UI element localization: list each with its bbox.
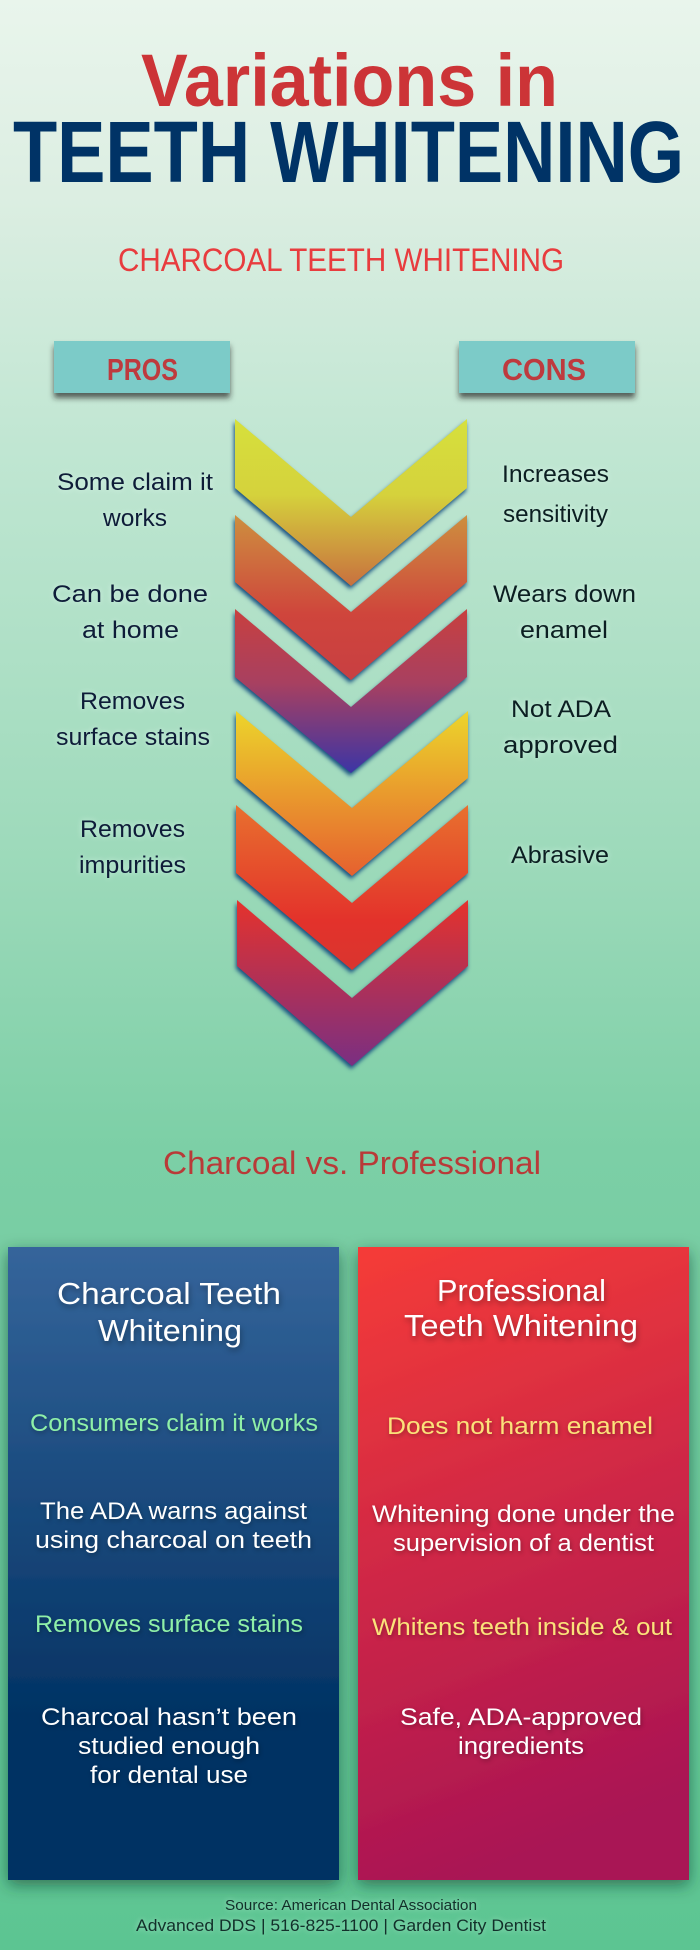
chevron 3 — [235, 609, 467, 773]
pro: removes impurities: impurities — [79, 852, 186, 879]
cons label box: CONS — [502, 352, 586, 387]
section heading: charcoal teeth whitening: CHARCOAL TEETH WHITENING — [118, 242, 564, 278]
chevron 1 — [235, 419, 467, 586]
item: not studied enough — [41, 1704, 297, 1789]
cons list — [493, 461, 636, 869]
item: consumers claim: Consumers claim it works — [30, 1410, 318, 1437]
con: wears down enamel: Wears down — [493, 581, 636, 608]
item: ADA warns — [35, 1498, 312, 1554]
title — [13, 39, 684, 201]
pros label box: PROS — [107, 352, 178, 387]
con: not ADA approved — [503, 696, 618, 759]
item: safe ingredients: Safe, ADA-approved — [400, 1704, 642, 1731]
title line: Variations in: Variations in — [141, 39, 558, 122]
item: dentist supervision: supervision of a dentist — [393, 1530, 654, 1557]
con: not ADA approved: approved — [503, 732, 618, 759]
pro: removes impurities: Removes — [80, 816, 185, 843]
panel: professional teeth whitening — [358, 1247, 689, 1880]
panel heading: Charcoal Teeth — [57, 1277, 281, 1311]
pros list — [52, 469, 213, 879]
pro: removes impurities — [79, 816, 186, 879]
panel heading — [404, 1274, 638, 1343]
item: safe ingredients — [400, 1704, 642, 1760]
con: increases sensitivity — [502, 461, 609, 528]
section heading: charcoal vs professional: Charcoal vs. Professional — [163, 1145, 541, 1181]
pro: some claim it works: works — [102, 505, 167, 532]
source line: Source: American Dental Association — [225, 1898, 477, 1914]
chevron 6 — [237, 900, 468, 1066]
pro: removes surface stains — [56, 688, 210, 751]
pro: some claim it works — [57, 469, 213, 532]
panel heading: Whitening — [98, 1314, 242, 1348]
item: ADA warns: The ADA warns against — [40, 1498, 307, 1525]
item: not studied enough: Charcoal hasn’t been — [41, 1704, 297, 1731]
con: increases sensitivity: sensitivity — [503, 501, 608, 528]
contact line: Advanced DDS | 516-825-1100 | Garden City Dentist — [136, 1917, 546, 1935]
chevron 2 — [235, 515, 467, 680]
con: abrasive: Abrasive — [511, 842, 609, 869]
con: wears down enamel — [493, 581, 636, 644]
pros label box — [54, 341, 230, 393]
panel heading: Professional — [437, 1274, 606, 1308]
chevron 4 — [236, 711, 468, 876]
pro: can be done at home — [52, 581, 208, 644]
chevron stack — [235, 419, 468, 1066]
panel heading: Teeth Whitening — [404, 1309, 638, 1343]
con: increases sensitivity: Increases — [502, 461, 609, 488]
footer — [136, 1898, 546, 1935]
cons label box — [459, 341, 635, 393]
item: safe ingredients: ingredients — [458, 1733, 584, 1760]
item: not studied enough: for dental use — [90, 1762, 248, 1789]
item: does not harm enamel: Does not harm enamel — [387, 1413, 653, 1440]
item: removes surface stains: Removes surface stains — [35, 1611, 303, 1638]
item: not studied enough: studied enough — [78, 1733, 260, 1760]
item: dentist supervision — [372, 1501, 675, 1557]
panel heading — [57, 1277, 281, 1348]
pro: some claim it works: Some claim it — [57, 469, 213, 496]
pro: removes surface stains: surface stains — [56, 724, 210, 751]
pro: can be done at home: Can be done — [52, 581, 208, 608]
pro: can be done at home: at home — [82, 617, 179, 644]
con: wears down enamel: enamel — [520, 617, 608, 644]
panel: charcoal teeth whitening — [8, 1247, 339, 1880]
chevron 5 — [236, 805, 468, 970]
item: whitens inside and out: Whitens teeth inside & out — [372, 1614, 672, 1641]
con: not ADA approved: Not ADA — [511, 696, 611, 723]
pro: removes surface stains: Removes — [80, 688, 185, 715]
item: ADA warns: using charcoal on teeth — [35, 1527, 312, 1554]
item: dentist supervision: Whitening done under the — [372, 1501, 675, 1528]
